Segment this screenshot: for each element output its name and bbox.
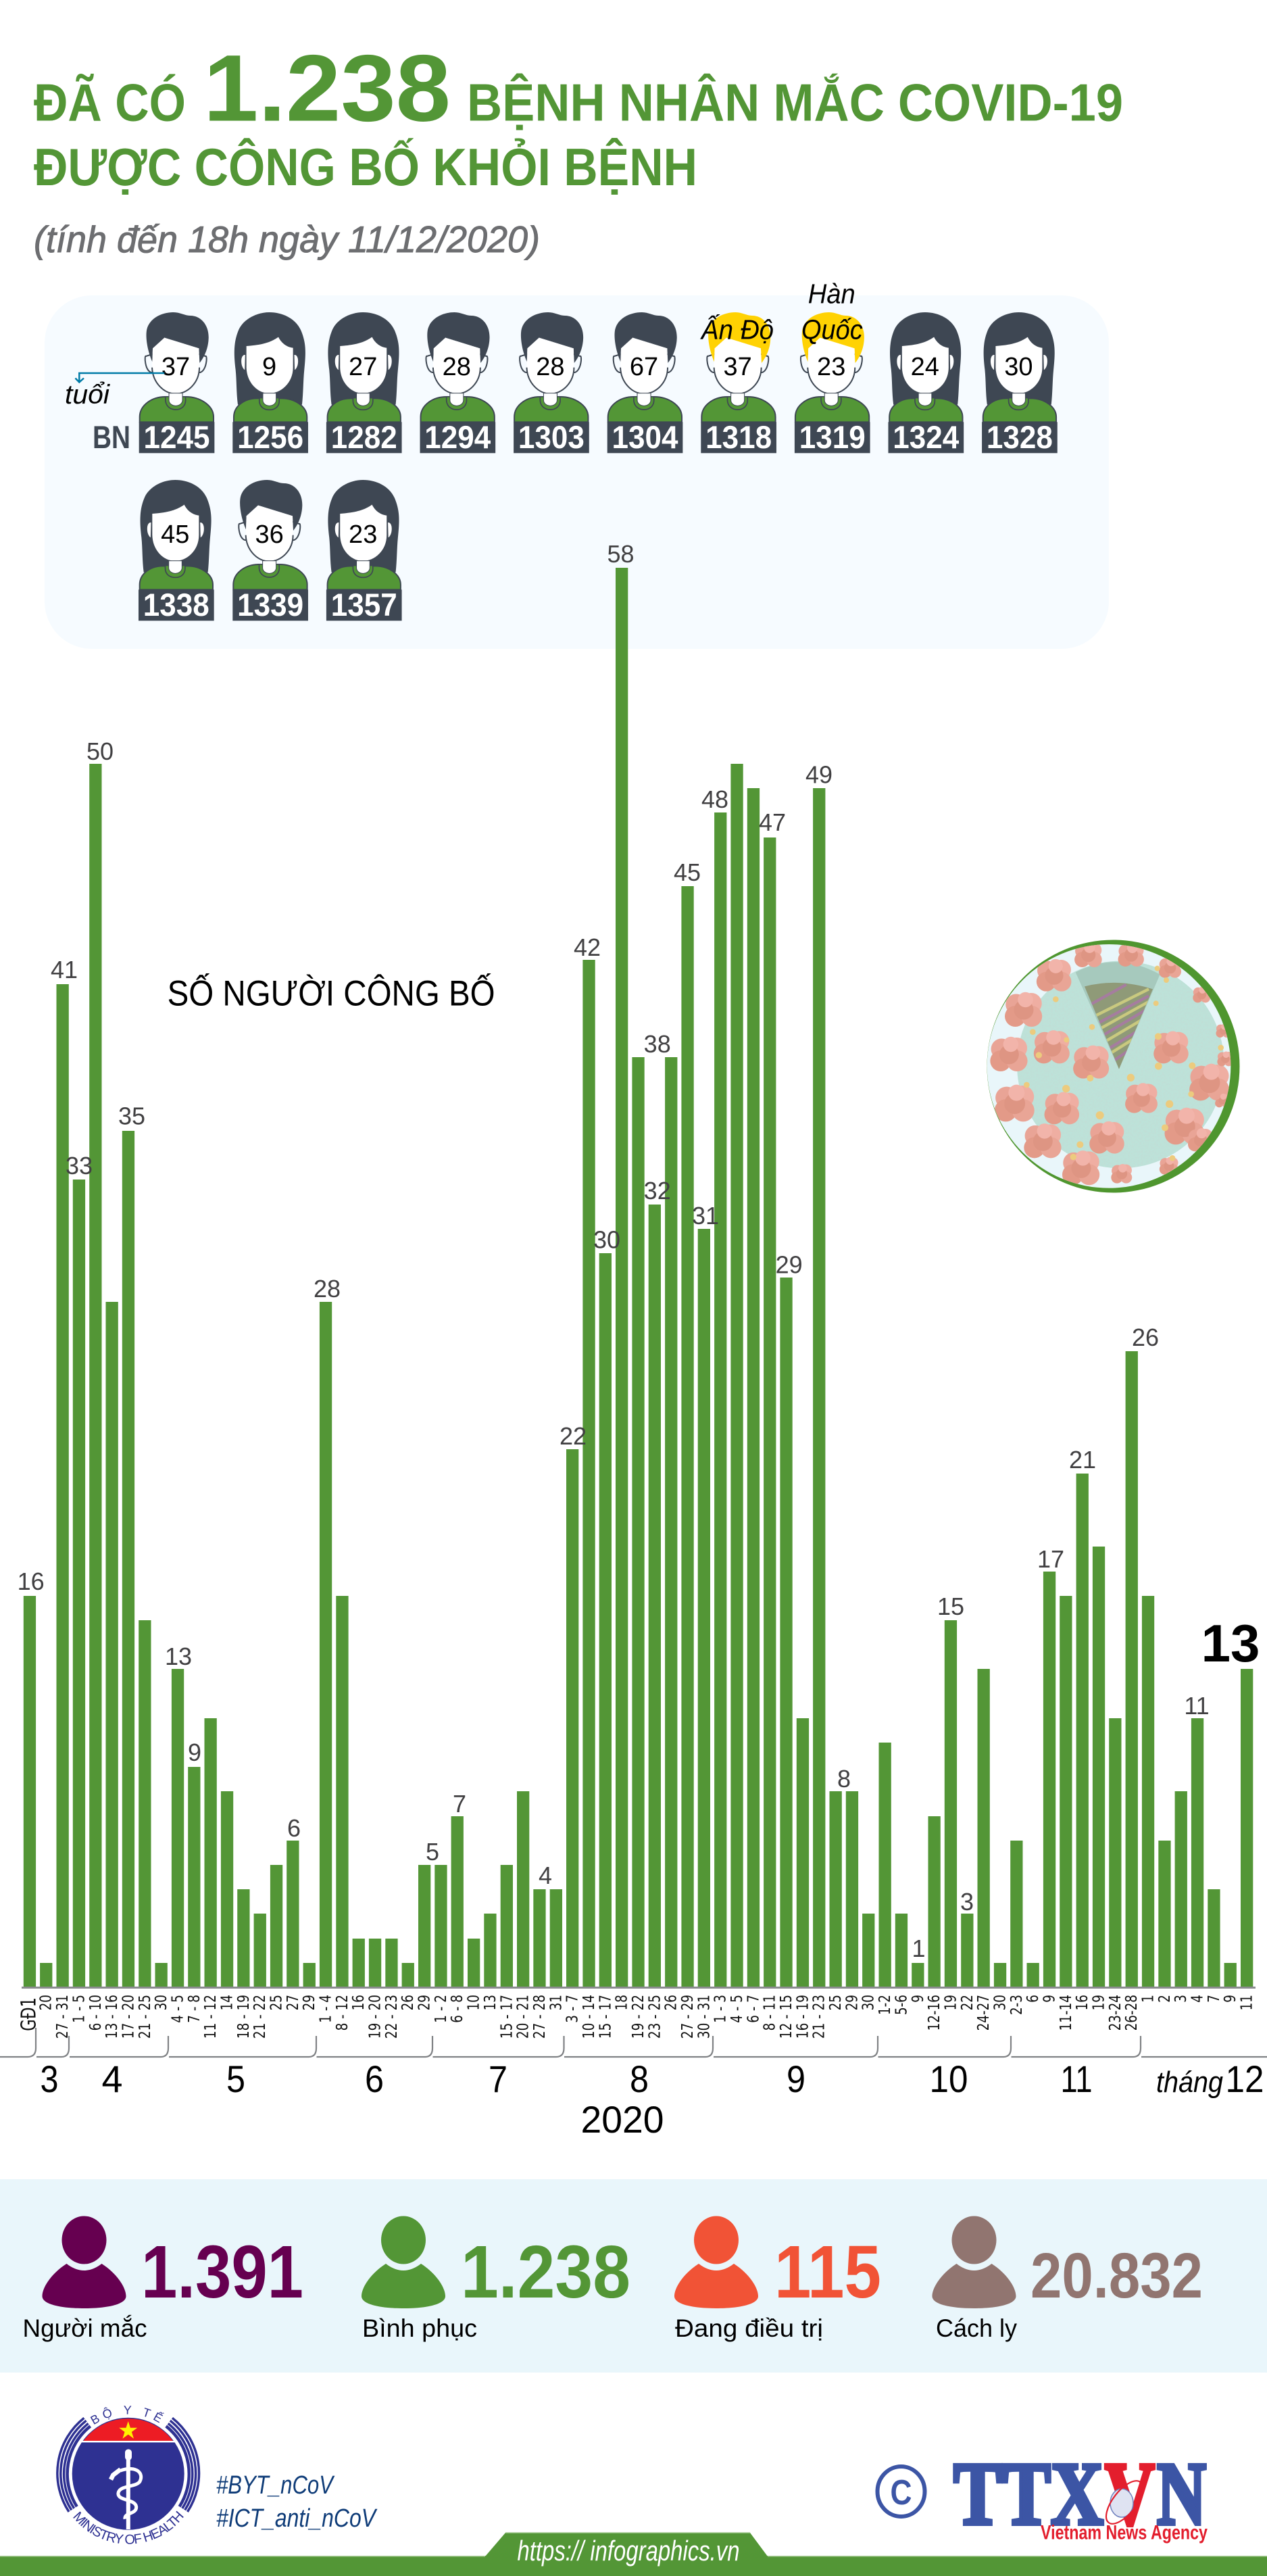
- stat: recovered: Bình phục: [362, 2314, 477, 2342]
- virus illustration: [987, 940, 1239, 1192]
- stat: cases: 1.391: [141, 2231, 303, 2314]
- date labels: 2: [1156, 1995, 1173, 2003]
- date labels: 29: [300, 1995, 318, 2010]
- date labels: 27 - 28: [530, 1995, 548, 2039]
- patient row 1: 1304: [612, 419, 678, 455]
- date labels: 19 - 22: [629, 1995, 647, 2039]
- date labels: 12-16: [925, 1995, 943, 2031]
- month labels: 2020: [581, 2098, 664, 2141]
- website url: https:// infographics.vn: [518, 2535, 739, 2567]
- title: ĐÃ CÓ: [34, 73, 186, 132]
- date labels: 4 - 5: [728, 1995, 746, 2023]
- patient row 2: 36: [255, 520, 284, 549]
- patient row 1: 1328: [987, 419, 1053, 455]
- month labels: 12: [1226, 2058, 1264, 2100]
- date labels: 6 - 10: [86, 1995, 104, 2031]
- date labels: [17, 1995, 1256, 2039]
- bar chart: [0, 540, 1267, 2141]
- date labels: 1: [1139, 1995, 1157, 2003]
- month labels: 9: [787, 2058, 805, 2100]
- bar value labels: 22: [560, 1422, 587, 1450]
- date labels: 21 - 22: [251, 1995, 269, 2039]
- date labels: 3: [1172, 1995, 1190, 2003]
- date labels: 18: [613, 1995, 630, 2010]
- date labels: 21 - 23: [810, 1995, 828, 2039]
- bar value labels: 11: [1184, 1692, 1210, 1720]
- date labels: 19: [1090, 1995, 1108, 2010]
- bar value labels: 58: [607, 540, 635, 568]
- date labels: 30: [152, 1995, 170, 2010]
- bar value labels: 38: [644, 1030, 671, 1058]
- patient row 2: 23: [349, 520, 377, 549]
- patient row 1: [139, 312, 1058, 455]
- date labels: 27: [284, 1995, 301, 2010]
- date labels: 17 - 20: [119, 1995, 137, 2039]
- month labels: 4: [101, 2058, 123, 2100]
- patient row 1: 28: [536, 353, 565, 381]
- nationality: Korea: Hàn: [808, 278, 855, 309]
- nationality: India: Ấn Độ: [699, 314, 774, 345]
- footer bar: [0, 2533, 1267, 2576]
- date labels: 22 - 23: [382, 1995, 400, 2039]
- date labels: 25: [826, 1995, 845, 2010]
- date labels: 9: [1041, 1995, 1058, 2003]
- month labels: 11: [1061, 2058, 1092, 2100]
- logo: Ministry of Health: [56, 2406, 200, 2544]
- patient row 1: 1256: [237, 419, 303, 455]
- date labels: 18 - 19: [234, 1995, 252, 2039]
- bar value labels: 28: [314, 1275, 341, 1303]
- date labels: 16 - 19: [793, 1995, 812, 2039]
- date labels: 15 - 17: [596, 1995, 614, 2039]
- arrow: age pointer: [76, 373, 164, 383]
- bar value labels: 16: [18, 1568, 45, 1595]
- highlighted latest value: 13: [1201, 1613, 1260, 1673]
- BN label: BN: [93, 419, 130, 455]
- panel: recovered patients: [45, 278, 1109, 649]
- month labels: 3: [41, 2058, 58, 2100]
- patient row 2: 45: [161, 520, 189, 549]
- date labels: 23 - 25: [645, 1995, 664, 2039]
- patient row 1: 27: [349, 353, 377, 381]
- hashtags: [216, 2471, 378, 2533]
- month labels: 5: [226, 2058, 245, 2100]
- logo: TTXVN: TTX: [953, 2444, 1103, 2544]
- patient row 1: 28: [443, 353, 471, 381]
- bar value labels: 6: [287, 1814, 301, 1842]
- logo: TTXVN: N: [1157, 2444, 1206, 2544]
- date labels: GĐ1: [17, 1997, 41, 2031]
- patient row 2: 1357: [331, 587, 397, 623]
- copyright symbol: C: [891, 2473, 912, 2512]
- age label: tuổi: [65, 380, 110, 410]
- date labels: 30 - 31: [695, 1995, 713, 2039]
- stat: in treatment: 115: [774, 2231, 881, 2314]
- date labels: 26: [662, 1995, 680, 2010]
- date labels: 11: [1238, 1995, 1256, 2010]
- copyright symbol: [877, 2466, 924, 2517]
- patient row 1: 37: [162, 353, 190, 381]
- date labels: 30: [860, 1995, 877, 2010]
- date labels: 26: [399, 1995, 417, 2010]
- panel: summary statistics: [0, 2179, 1267, 2373]
- date labels: 10: [465, 1995, 482, 2010]
- patient row 1: 1319: [799, 419, 866, 455]
- month labels: 7: [489, 2058, 507, 2100]
- month labels: [41, 2058, 1264, 2141]
- nationality: Korea: Quốc: [801, 314, 863, 345]
- patient row 1: 30: [1004, 353, 1033, 381]
- patient row 1: 24: [911, 353, 939, 381]
- patient row 1: 1282: [331, 419, 397, 455]
- month caption: tháng: [1156, 2066, 1223, 2099]
- hashtags: #ICT_anti_nCoV: [216, 2504, 378, 2533]
- date labels: 7 - 8: [185, 1995, 203, 2023]
- date labels: 27 - 31: [53, 1995, 72, 2039]
- title: 1.238: [203, 35, 451, 141]
- date labels: 4: [1189, 1995, 1206, 2003]
- patient row 1: 9: [262, 353, 276, 381]
- stat: recovered: [362, 2216, 630, 2342]
- date labels: 1 - 5: [70, 1995, 88, 2023]
- date labels: 1 - 3: [712, 1995, 729, 2023]
- date labels: 1-2: [876, 1995, 894, 2015]
- bar value labels: 42: [574, 933, 601, 961]
- bar value labels: 13: [165, 1643, 192, 1670]
- nationality: Korea: [801, 278, 863, 345]
- date labels: 8 - 11: [761, 1995, 778, 2031]
- date labels: 22: [958, 1995, 976, 2010]
- title: [34, 35, 1123, 197]
- patient row 1: 1245: [143, 419, 209, 455]
- logo: TTXVN: V: [1105, 2444, 1155, 2544]
- date labels: 10 - 14: [580, 1995, 598, 2039]
- patient row 2: 1339: [237, 587, 303, 623]
- month brackets: [0, 2028, 1267, 2057]
- title: BỆNH NHÂN MẮC COVID-19: [467, 73, 1123, 132]
- bar value labels: 8: [837, 1765, 851, 1793]
- date labels: 3 - 7: [564, 1995, 581, 2023]
- date labels: 24-27: [974, 1995, 993, 2031]
- bar value labels: 31: [692, 1202, 719, 1230]
- bar value labels: 5: [426, 1838, 439, 1866]
- logo: TTXVN: Vietnam News Agency: [1041, 2521, 1208, 2544]
- bar value labels: 15: [937, 1593, 964, 1620]
- date labels: 6 - 7: [744, 1995, 762, 2023]
- patient row 1: 1318: [705, 419, 772, 455]
- bar value labels: 1: [912, 1935, 926, 1962]
- patient row 1: 1303: [518, 419, 585, 455]
- date labels: 19: [941, 1995, 960, 2010]
- date labels: 25: [268, 1995, 285, 2010]
- date labels: 20 - 21: [514, 1995, 532, 2039]
- date labels: 15 - 17: [497, 1995, 516, 2039]
- stat: quarantine: Cách ly: [936, 2314, 1017, 2342]
- date labels: 8 - 12: [333, 1995, 351, 2031]
- date labels: 23-24: [1106, 1995, 1124, 2031]
- bar value labels: 29: [776, 1250, 803, 1279]
- date labels: 19 - 20: [366, 1995, 384, 2039]
- patient row 2: [139, 480, 402, 623]
- date labels: 26-28: [1122, 1995, 1141, 2031]
- bar value labels: 30: [593, 1226, 620, 1253]
- date labels: 16: [349, 1995, 368, 2010]
- stat: cases: Người mắc: [23, 2314, 147, 2342]
- patient row 1: 67: [630, 353, 658, 381]
- logo: Ministry of Health: MINISTRY OF HEALTH: [73, 2510, 184, 2544]
- stat: quarantine: [933, 2216, 1203, 2342]
- patient row 1: 1294: [424, 419, 491, 455]
- date labels: 20: [37, 1995, 55, 2010]
- bar value labels: 35: [118, 1102, 145, 1130]
- bar value labels: 3: [960, 1888, 974, 1916]
- hashtags: #BYT_nCoV: [216, 2471, 335, 2500]
- patient row 2: 1338: [143, 587, 209, 623]
- stat: in treatment: Đang điều trị: [675, 2314, 823, 2342]
- month labels: 6: [365, 2058, 384, 2100]
- date labels: 13 - 16: [103, 1995, 121, 2039]
- date labels: 12 - 15: [777, 1995, 795, 2039]
- bar value labels: 47: [759, 808, 786, 836]
- patient row 1: 37: [723, 353, 752, 381]
- date labels: 9: [909, 1995, 926, 2003]
- bar value labels: 48: [701, 785, 728, 813]
- date labels: 5-6: [892, 1995, 910, 2015]
- date labels: 29: [843, 1995, 861, 2010]
- bars: [24, 568, 1253, 1987]
- subtitle: (tính đến 18h ngày 11/12/2020): [34, 218, 540, 260]
- month labels: 8: [630, 2058, 649, 2100]
- date labels: 4 - 5: [169, 1995, 187, 2023]
- bar value labels: 45: [674, 858, 701, 886]
- date labels: 31: [547, 1995, 565, 2010]
- stat: recovered: 1.238: [461, 2231, 630, 2314]
- date labels: 27 - 29: [678, 1995, 697, 2039]
- bar value labels: 49: [805, 761, 833, 788]
- bar value labels: 33: [66, 1152, 93, 1180]
- date labels: 14: [218, 1995, 236, 2010]
- bar value labels: 26: [1132, 1323, 1159, 1351]
- bar value labels: 41: [51, 956, 78, 983]
- date labels: 13: [481, 1995, 499, 2010]
- logo: Ministry of Health: BỘ Y TẾ: [91, 2406, 164, 2425]
- date labels: 6 - 8: [448, 1995, 466, 2023]
- patient row 1: 23: [817, 353, 845, 381]
- date labels: 29: [416, 1995, 433, 2010]
- date labels: 6: [1024, 1995, 1042, 2003]
- date labels: 11 - 12: [201, 1995, 220, 2039]
- bar value labels: 17: [1037, 1545, 1064, 1573]
- bar value labels: 21: [1069, 1446, 1096, 1474]
- stat: cases: [23, 2216, 303, 2342]
- date labels: 11-14: [1057, 1995, 1074, 2031]
- bar value labels: 4: [539, 1862, 552, 1889]
- date labels: 1 - 4: [317, 1995, 334, 2023]
- date labels: 2-3: [1008, 1995, 1025, 2015]
- date labels: 30: [991, 1995, 1009, 2010]
- stat: quarantine: 20.832: [1030, 2240, 1203, 2312]
- chart title: SỐ NGƯỜI CÔNG BỐ: [168, 973, 495, 1014]
- date labels: 21 - 25: [136, 1995, 153, 2039]
- stat: in treatment: [674, 2216, 881, 2342]
- bar value labels: 7: [453, 1790, 466, 1818]
- title: ĐƯỢC CÔNG BỐ KHỎI BỆNH: [34, 137, 697, 197]
- date labels: 7: [1205, 1995, 1222, 2003]
- date labels: 1 - 2: [432, 1995, 449, 2023]
- bar value labels: 9: [188, 1739, 201, 1766]
- bar value labels: [18, 540, 1210, 1962]
- date labels: 9: [1221, 1995, 1239, 2003]
- bar value labels: 50: [86, 737, 114, 765]
- date labels: 16: [1073, 1995, 1091, 2010]
- month labels: 10: [930, 2058, 968, 2100]
- bar value labels: 32: [644, 1177, 671, 1205]
- patient row 1: 1324: [893, 419, 959, 455]
